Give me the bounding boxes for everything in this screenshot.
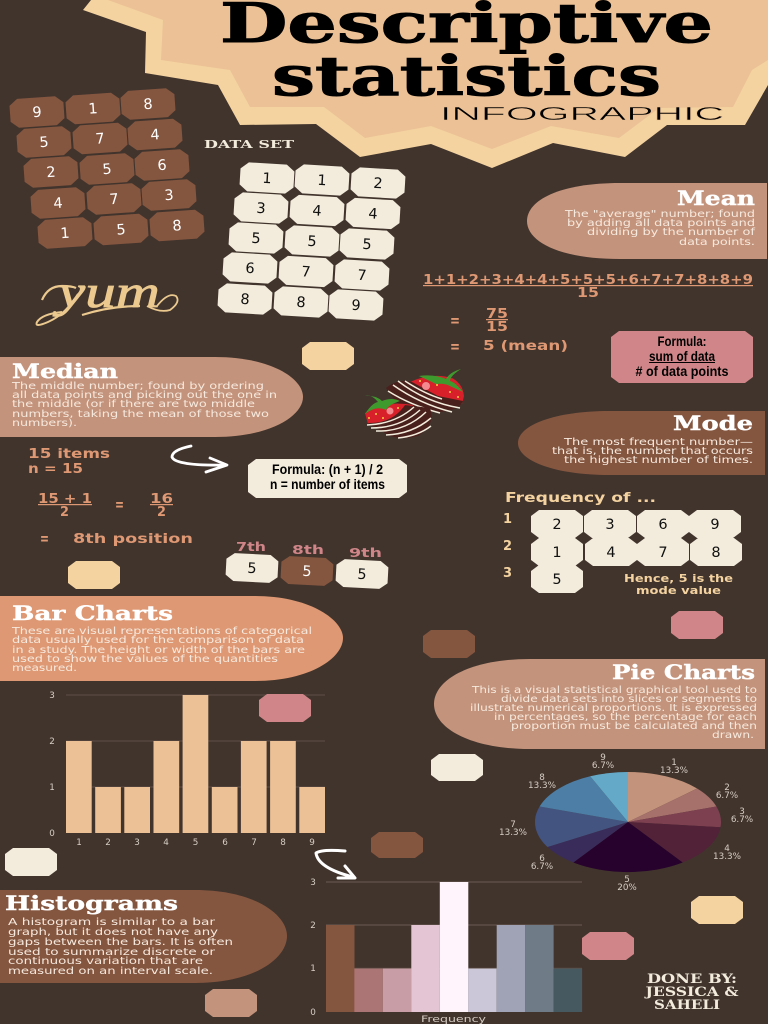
text: median description: numbers, taking the mean of those two bbox=[12, 409, 269, 420]
median position tiles: 7th bbox=[236, 539, 266, 554]
callout: mean formula: Formula: bbox=[658, 333, 706, 349]
bar chart: 8 bbox=[280, 838, 286, 848]
median calculation: = bbox=[40, 529, 49, 548]
decorative tile: brown bbox=[423, 630, 475, 658]
decorative tile: peach left bbox=[68, 561, 120, 589]
unordered number tiles: 5 bbox=[102, 162, 112, 178]
callout: median formula: n = number of items bbox=[270, 476, 385, 492]
text: median description: The middle number; found by ordering bbox=[11, 381, 264, 392]
panel: pie charts bbox=[434, 659, 765, 749]
median calculation: 16 bbox=[150, 491, 173, 507]
heading: bar charts: Bar Charts bbox=[12, 601, 173, 625]
histogram chart: 0 bbox=[310, 1008, 316, 1018]
mode frequency table: 1 bbox=[503, 512, 512, 527]
unordered number tiles: 8 bbox=[143, 97, 153, 113]
text: histograms description: continuous variation that are bbox=[8, 956, 203, 967]
text: mode description: The most frequent number— bbox=[563, 437, 753, 448]
bar chart: 0 bbox=[49, 829, 55, 839]
credits: JESSICA & bbox=[644, 985, 739, 1000]
median calculation: 15 items bbox=[28, 446, 110, 462]
mode frequency table: mode value bbox=[636, 584, 721, 597]
mode frequency table bbox=[503, 490, 742, 597]
pie chart: 6.7% bbox=[531, 862, 553, 872]
decorative tile: cream center bbox=[431, 754, 483, 781]
unordered number tiles: 7 bbox=[109, 192, 119, 208]
arrow: to histogram bbox=[316, 850, 355, 878]
pie chart: 20% bbox=[617, 883, 637, 893]
median position tiles bbox=[225, 539, 389, 589]
callout: mean formula bbox=[611, 331, 753, 383]
ordered data set tiles: 3 bbox=[256, 201, 266, 217]
bar chart: 7 bbox=[251, 838, 257, 848]
mode frequency table: 1 bbox=[552, 545, 562, 561]
pie chart: 3 bbox=[739, 807, 745, 817]
bar chart: 2 bbox=[105, 838, 111, 848]
heading: median: Median bbox=[12, 359, 119, 383]
text: mode description bbox=[552, 437, 753, 466]
unordered number tiles: 5 bbox=[39, 135, 49, 151]
text: pie charts description: This is a visual statistical graphical tool used to bbox=[471, 685, 757, 696]
credits: DONE BY: bbox=[647, 972, 737, 987]
text: bar charts description: used to show the values of the quantities bbox=[12, 654, 278, 665]
text: histograms description: used to summarize discrete or bbox=[8, 947, 216, 958]
unordered number tiles: 3 bbox=[164, 188, 174, 204]
unordered number tiles: 8 bbox=[172, 218, 182, 235]
decorative tile: brown center bbox=[371, 832, 423, 858]
text: median description: numbers). bbox=[12, 418, 77, 429]
pie chart: 13.3% bbox=[713, 852, 741, 862]
ordered data set tiles: 8 bbox=[296, 295, 306, 311]
histogram chart: 2 bbox=[310, 921, 316, 931]
median calculation: n = 15 bbox=[28, 461, 83, 477]
mode frequency table: 3 bbox=[503, 566, 512, 581]
decorative tile: tan bbox=[205, 989, 257, 1017]
data set label: DATA SET bbox=[204, 137, 295, 151]
mean calculation: = bbox=[450, 337, 460, 356]
ordered data set tiles: 5 bbox=[251, 231, 261, 247]
callout: median formula bbox=[248, 459, 407, 498]
ordered data set tiles: 6 bbox=[245, 261, 255, 277]
unordered number tiles: 9 bbox=[32, 105, 42, 121]
histogram chart bbox=[310, 878, 582, 1024]
mean calculation: 15 bbox=[577, 285, 599, 301]
text: mean description: by adding all data points and bbox=[567, 218, 755, 229]
bar chart: 3 bbox=[49, 691, 55, 701]
bar chart bbox=[49, 691, 325, 848]
unordered number tiles bbox=[9, 88, 205, 249]
text: histograms description: measured on an interval scale. bbox=[8, 966, 213, 977]
decorative tile: pink lower bbox=[582, 932, 634, 960]
text: pie charts description bbox=[470, 685, 757, 741]
panel: bar charts bbox=[0, 596, 343, 681]
heading: pie charts: Pie Charts bbox=[612, 660, 755, 684]
text: bar charts description: data usually used for the comparison of data bbox=[12, 635, 304, 646]
text: histograms description: gaps between the bars. It is often bbox=[8, 937, 233, 948]
ordered data set tiles: 8 bbox=[240, 292, 250, 308]
text: median description: all data points and picking out the one in bbox=[12, 390, 277, 401]
bar chart: 1 bbox=[49, 783, 55, 793]
mode frequency table: 9 bbox=[710, 517, 720, 533]
median calculation: = bbox=[115, 495, 124, 514]
mode frequency table: 8 bbox=[711, 545, 721, 561]
decorative tile: pink bbox=[671, 611, 723, 639]
pie chart: 6.7% bbox=[716, 791, 738, 801]
credits bbox=[644, 972, 739, 1013]
panel: mode bbox=[518, 411, 765, 475]
text: median description bbox=[11, 381, 277, 429]
title banner starburst bbox=[83, 0, 768, 168]
arrow: median to formula bbox=[172, 446, 227, 472]
pie chart: 6 bbox=[539, 854, 545, 864]
pie chart: 13.3% bbox=[528, 781, 556, 791]
pie chart: 6.7% bbox=[592, 761, 614, 771]
bar chart: 5 bbox=[193, 838, 198, 848]
median calculation: 15 + 1 bbox=[38, 491, 92, 507]
decorative tile: cream left bbox=[5, 848, 57, 876]
unordered number tiles: 6 bbox=[157, 158, 167, 174]
unordered number tiles: 4 bbox=[53, 196, 63, 212]
pie chart: 9 bbox=[600, 753, 606, 763]
unordered number tiles: 5 bbox=[116, 222, 126, 239]
unordered number tiles: 1 bbox=[88, 101, 98, 118]
unordered number tiles: 2 bbox=[46, 165, 56, 181]
text: pie charts description: divide data sets into slices or segments to bbox=[501, 694, 757, 705]
pie chart: 7 bbox=[510, 820, 516, 830]
text: pie charts description: illustrate numerical proportions. It is expressed bbox=[470, 703, 757, 714]
icon: chocolate strawberries bbox=[365, 369, 464, 438]
ordered data set tiles: 7 bbox=[357, 268, 367, 284]
callout: median formula: Formula: (n + 1) / 2 bbox=[272, 461, 383, 477]
text: histograms description: A histogram is similar to a bar bbox=[8, 917, 216, 928]
text: mean description: dividing by the number of bbox=[587, 227, 756, 238]
decorative tile: pink in chart bbox=[259, 694, 311, 722]
pie chart: 5 bbox=[624, 875, 630, 885]
median calculation bbox=[28, 446, 193, 548]
text: median description: the middle (or if there are two middle bbox=[12, 399, 255, 410]
ordered data set tiles: 7 bbox=[301, 264, 311, 281]
text: mean description: data points. bbox=[679, 237, 755, 248]
histogram chart: 3 bbox=[310, 878, 316, 888]
mode frequency table: 2 bbox=[552, 517, 562, 533]
bar chart: 9 bbox=[309, 838, 315, 848]
median position tiles: 5 bbox=[302, 564, 312, 580]
unordered number tiles: 7 bbox=[95, 131, 105, 148]
ordered data set tiles bbox=[217, 162, 406, 321]
ordered data set tiles: 4 bbox=[312, 203, 322, 220]
mode frequency table: Frequency of ... bbox=[505, 490, 656, 506]
ordered data set tiles: 9 bbox=[351, 298, 361, 314]
mean calculation: = bbox=[450, 311, 460, 330]
text: bar charts description: These are visual representations of categorical bbox=[11, 626, 312, 637]
subtitle: INFOGRAPHIC bbox=[440, 104, 724, 124]
text: mode description: that is, the number that occurs bbox=[552, 446, 753, 457]
mode frequency table: 2 bbox=[503, 539, 512, 554]
text: pie charts description: proportion must be calculated and then bbox=[511, 721, 757, 732]
title: statistics bbox=[272, 44, 661, 108]
panel: mean bbox=[527, 183, 767, 259]
decorative tile: peach right bbox=[691, 896, 743, 924]
heading: mean: Mean bbox=[677, 186, 756, 210]
text: bar charts description: in a study. The height or width of the bars are bbox=[12, 645, 305, 656]
bar chart: 2 bbox=[49, 737, 55, 747]
bar chart: 1 bbox=[76, 838, 82, 848]
pie chart: 4 bbox=[724, 844, 730, 854]
mean calculation: 5 (mean) bbox=[483, 338, 568, 354]
text: mean description bbox=[564, 209, 756, 248]
mode frequency table: 6 bbox=[658, 517, 668, 533]
mode frequency table: 4 bbox=[606, 545, 616, 561]
ordered data set tiles: 1 bbox=[317, 173, 327, 189]
title bbox=[220, 0, 713, 108]
pie chart: 13.3% bbox=[499, 828, 527, 838]
text: mean description: The "average" number; found bbox=[564, 209, 755, 220]
text: histograms description bbox=[8, 917, 233, 977]
median calculation: 2 bbox=[157, 504, 166, 520]
median calculation: 2 bbox=[60, 504, 69, 520]
yum script lettering: yum bbox=[53, 266, 160, 317]
text: bar charts description bbox=[11, 626, 312, 674]
panel: histograms bbox=[0, 890, 287, 983]
text: histograms description: graph, but it does not have any bbox=[8, 927, 218, 938]
yum script lettering bbox=[36, 266, 178, 325]
histogram chart: 1 bbox=[310, 964, 316, 974]
pie chart: 6.7% bbox=[731, 815, 753, 825]
ordered data set tiles: 4 bbox=[368, 206, 378, 223]
pie chart: 2 bbox=[724, 783, 730, 793]
bar chart: 6 bbox=[222, 838, 228, 848]
mean calculation bbox=[423, 272, 753, 356]
unordered number tiles: 1 bbox=[60, 226, 70, 242]
mode frequency table: Hence, 5 is the bbox=[624, 572, 733, 585]
pie chart bbox=[499, 753, 753, 893]
ordered data set tiles: 2 bbox=[373, 176, 383, 192]
mean calculation: 15 bbox=[486, 319, 508, 335]
mean calculation: 1+1+2+3+4+4+5+5+5+6+7+7+8+8+9 bbox=[423, 272, 753, 288]
mean calculation: 75 bbox=[486, 306, 508, 322]
bar chart: 3 bbox=[134, 838, 140, 848]
panel: median bbox=[0, 357, 303, 437]
ordered data set tiles: 5 bbox=[362, 237, 372, 253]
unordered number tiles: 4 bbox=[150, 127, 160, 144]
mode frequency table: 3 bbox=[605, 517, 615, 533]
callout: mean formula: sum of data bbox=[649, 348, 715, 364]
median calculation: 8th position bbox=[73, 531, 193, 547]
mode frequency table: 7 bbox=[658, 545, 668, 561]
text: mode description: the highest number of times. bbox=[564, 455, 753, 466]
bar chart: 4 bbox=[163, 838, 169, 848]
pie chart: 8 bbox=[539, 773, 545, 783]
heading: histograms: Histograms bbox=[5, 891, 178, 915]
decorative tile: peach bbox=[302, 342, 354, 370]
median position tiles: 8th bbox=[292, 542, 324, 557]
median position tiles: 5 bbox=[247, 561, 257, 577]
text: pie charts description: in percentages, so the percentage for each bbox=[494, 712, 757, 723]
median position tiles: 9th bbox=[349, 545, 382, 560]
pie chart: 13.3% bbox=[660, 766, 688, 776]
heading: mode: Mode bbox=[673, 411, 753, 435]
ordered data set tiles: 1 bbox=[262, 171, 272, 187]
median position tiles: 5 bbox=[357, 567, 367, 583]
pie chart: 1 bbox=[671, 758, 677, 768]
callout: mean formula: # of data points bbox=[636, 363, 729, 379]
ordered data set tiles: 5 bbox=[307, 234, 317, 250]
mode frequency table: 5 bbox=[552, 572, 562, 588]
credits: SAHELI bbox=[654, 998, 720, 1013]
text: bar charts description: measured. bbox=[12, 663, 77, 674]
text: pie charts description: drawn. bbox=[712, 730, 754, 741]
